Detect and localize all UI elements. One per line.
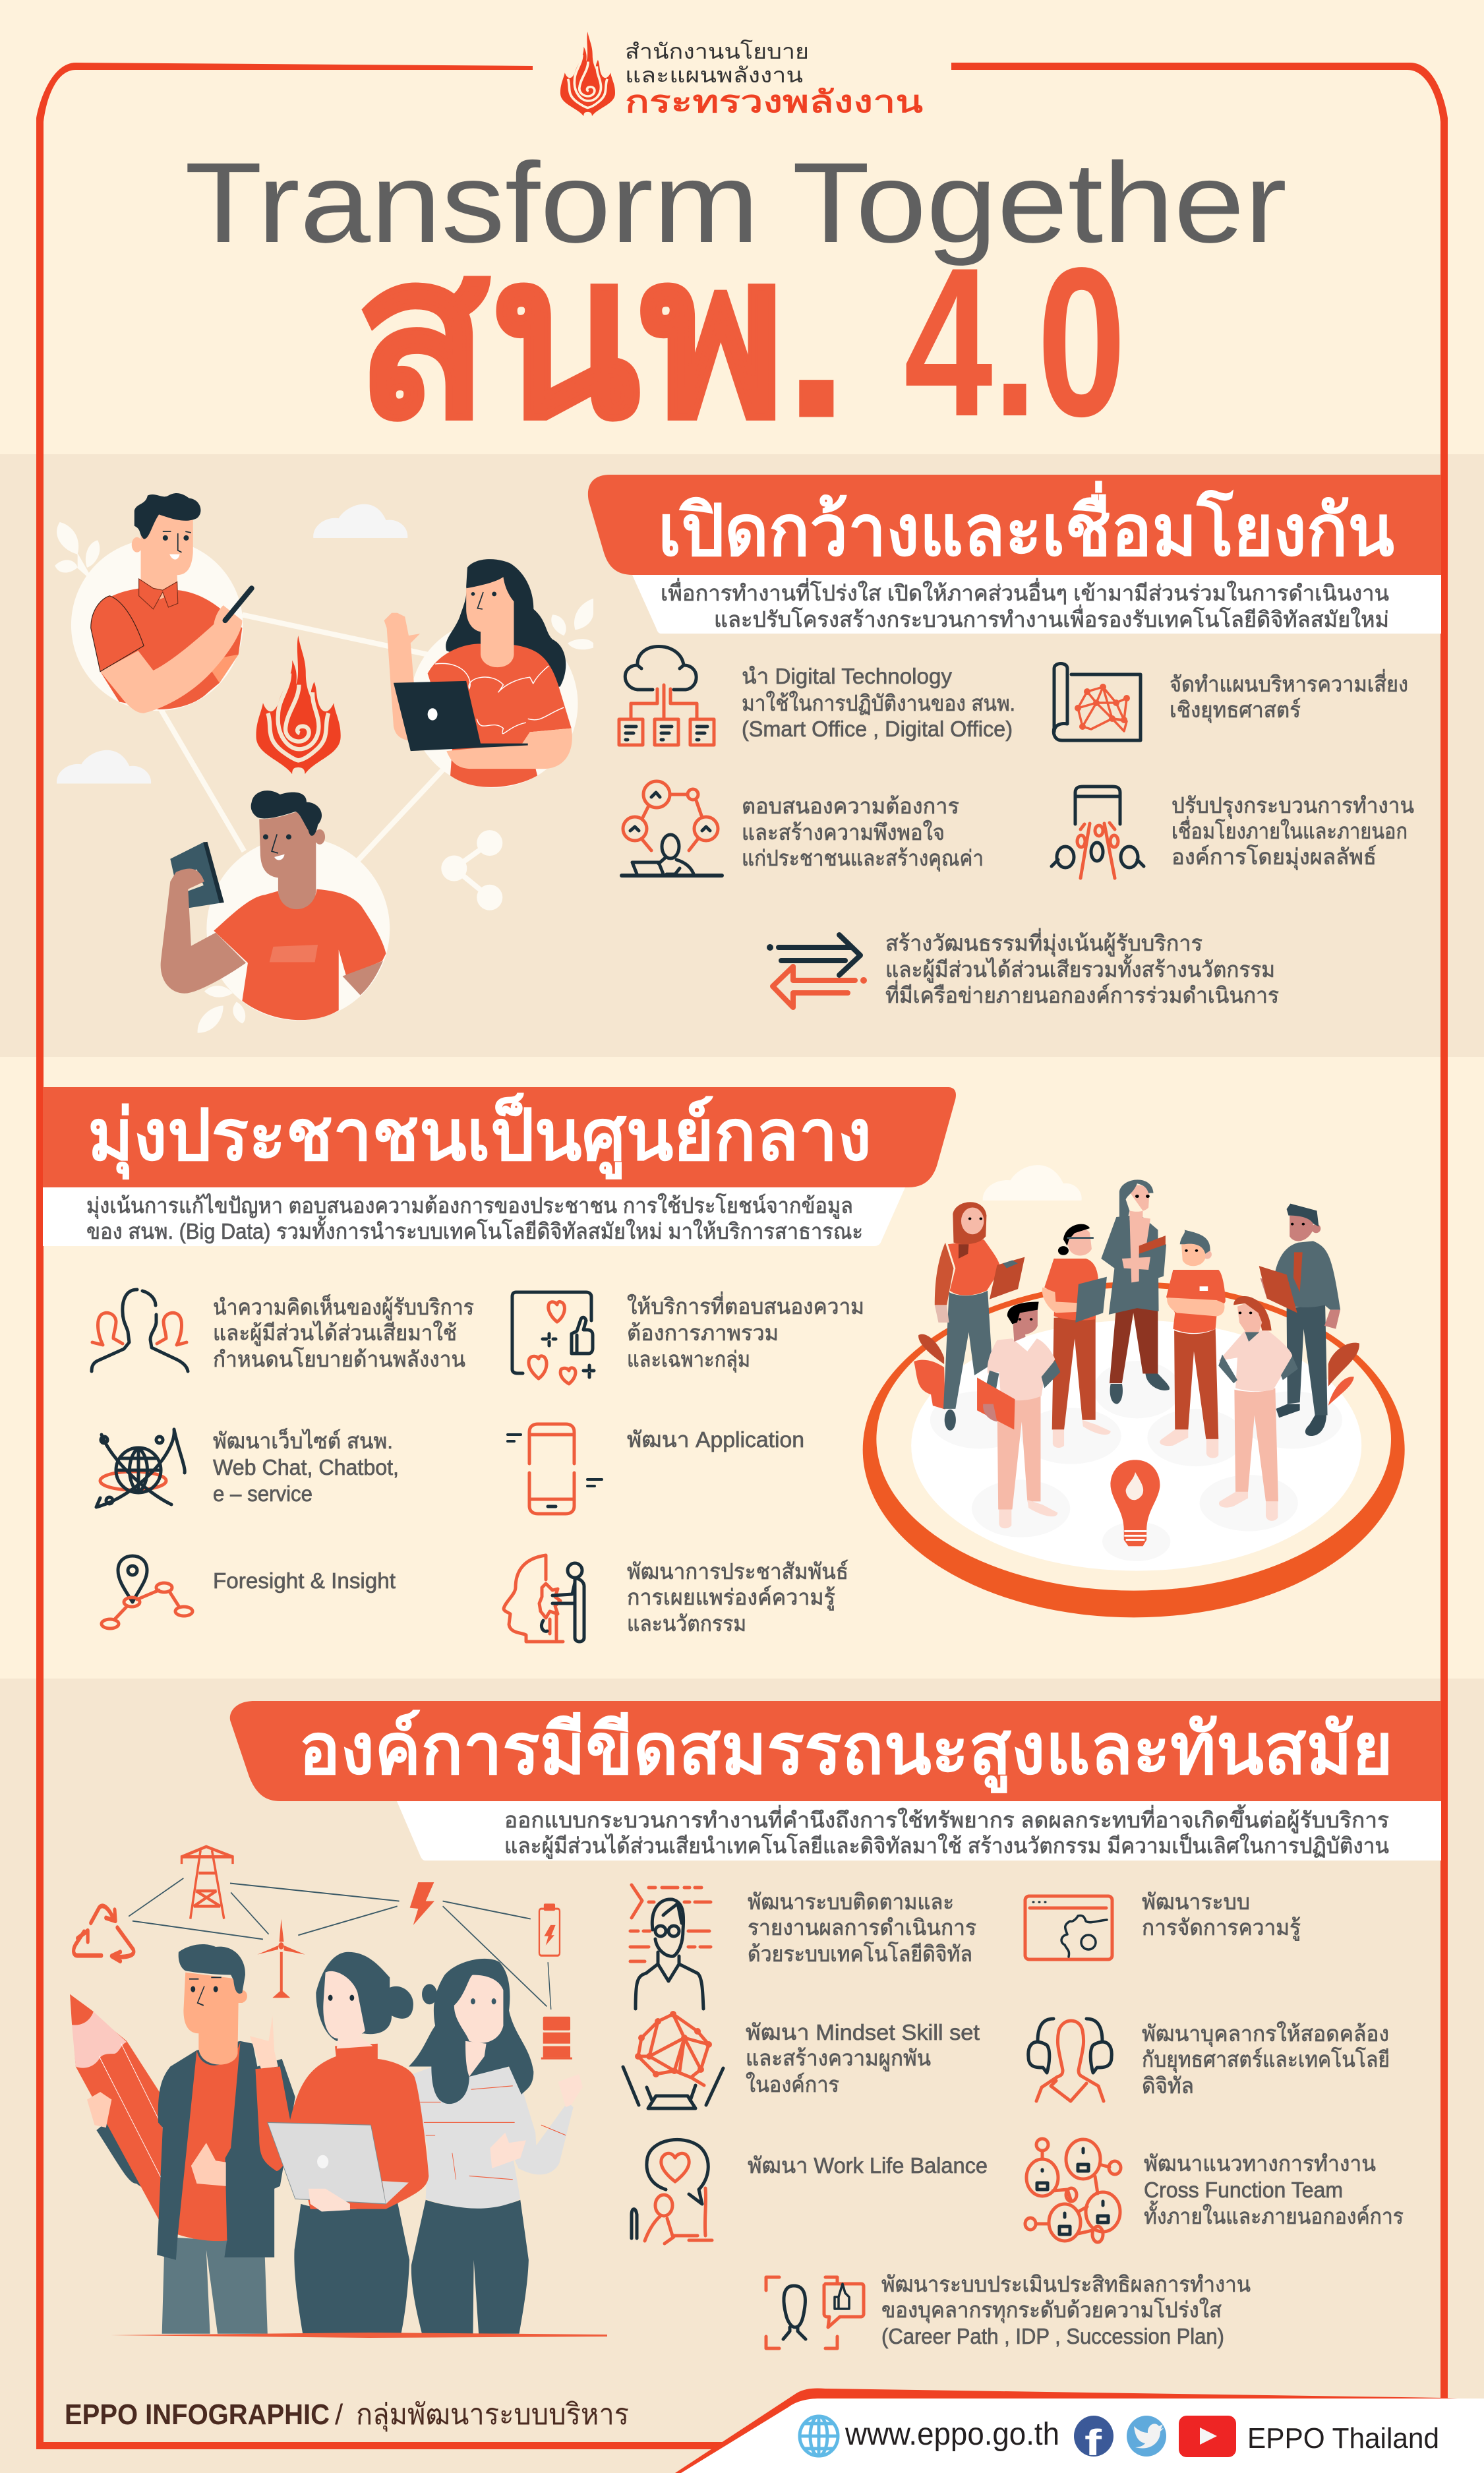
- icon: likes tablet: [512, 1292, 594, 1384]
- footer: [65, 2389, 1484, 2473]
- leaves right: [551, 599, 593, 649]
- website text: www.eppo.go.th: [845, 2417, 1059, 2452]
- icon: globe orbit: [96, 1429, 185, 1507]
- text: monitoring system: พัฒนาระบบติดตามและ: [748, 1890, 954, 1914]
- logo: ministry of energy: [560, 32, 923, 119]
- subheading strip: [632, 575, 1441, 634]
- subheading text: ออกแบบกระบวนการทำงานที่คำนึงถึงการใช้ทรัพยากร ลดผลกระทบที่อาจเกิดขึ้นต่อผู้รับบริการ: [504, 1804, 1389, 1833]
- panel: high performance organization: [230, 1701, 1441, 2348]
- text: culture: สร้างวัฒนธรรมที่มุ่งเน้นผู้รับบริการ: [885, 928, 1202, 957]
- text: staff alignment: ดิจิทัล: [1142, 2073, 1194, 2098]
- text: culture: และผู้มีส่วนได้ส่วนเสียรวมทั้งสร้างนวัตกรรม: [885, 954, 1275, 983]
- text: services: ต้องการภาพรวม: [627, 1321, 779, 1345]
- floor line: [111, 2333, 607, 2338]
- credit text: /: [335, 2399, 343, 2431]
- text: respond to needs: และสร้างความพึงพอใจ: [742, 820, 945, 845]
- heading banner: [588, 475, 1441, 575]
- text: digital technology: (Smart Office , Digital Office): [742, 717, 1013, 741]
- text: improve process: [1172, 793, 1414, 870]
- text: evaluation: [881, 2272, 1251, 2348]
- subheading text: และผู้มีส่วนได้ส่วนเสียนำเทคโนโลยีและดิจิทัลมาใช้ สร้างนวัตกรรม มีความเป็นเลิศในการปฏิบัติงาน: [504, 1833, 1389, 1859]
- panel: open and connected: [588, 475, 1441, 1007]
- text: foresight: Foresight & Insight: [213, 1568, 396, 1593]
- icon: browser gear: [1025, 1896, 1112, 1959]
- icon: phone team: [1052, 787, 1144, 878]
- text: services: และเฉพาะกลุ่ม: [627, 1347, 750, 1373]
- icon: oil barrel: [541, 2017, 572, 2060]
- person: woman in pink: [1218, 1296, 1298, 1521]
- icon: people talking: [1028, 2019, 1112, 2101]
- icon: lightning bolt: [410, 1882, 434, 1925]
- icon: youtube: [1179, 2416, 1236, 2457]
- subheading text: ของ สนพ. (Big Data) รวมทั้งการนำระบบเทคโนโลยีดิจิทัลสมัยใหม่ มาให้บริการสาธารณะ: [86, 1216, 863, 1243]
- panel: citizen centric: [43, 1087, 956, 1642]
- logo text: และแผนพลังงาน: [625, 63, 803, 87]
- icon: facebook: [1074, 2416, 1113, 2463]
- text: services: ให้บริการที่ตอบสนองความ: [627, 1292, 864, 1319]
- heading text: มุ่งประชาชนเป็นศูนย์กลาง: [88, 1092, 872, 1180]
- credit text: กลุ่มพัฒนาระบบบริหาร: [356, 2399, 629, 2432]
- subheading text: และปรับโครงสร้างกระบวนการทำงานเพื่อรองรับเทคโนโลยีดิจิทัลสมัยใหม่: [714, 605, 1389, 632]
- person: man with tablet: [161, 790, 386, 1020]
- title: EPPO 4.0: สนพ.: [355, 210, 847, 464]
- icon: battery: [539, 1903, 560, 1955]
- icon: wind turbine: [257, 1919, 305, 1998]
- heading text: เปิดกว้างและเชื่อมโยงกัน: [658, 481, 1394, 570]
- person: tall woman with coat: [1101, 1179, 1170, 1404]
- text: public relations: พัฒนาการประชาสัมพันธ์: [627, 1559, 848, 1584]
- text: website: พัฒนาเว็บไซต์ สนพ.: [213, 1428, 393, 1453]
- icon: exchange arrows: [767, 935, 867, 1007]
- text: public opinion: กำหนดนโยบายด้านพลังงาน: [213, 1347, 465, 1371]
- text: cross function team: Cross Function Team: [1144, 2178, 1343, 2202]
- cloud: [983, 1165, 1082, 1201]
- subheading text: [661, 578, 1389, 632]
- text: website: e – service: [213, 1481, 312, 1506]
- background band: section one: [0, 454, 1484, 1057]
- text: knowledge management: พัฒนาระบบ: [1142, 1890, 1250, 1914]
- person: woman with laptop: [384, 559, 572, 787]
- leaves left: [55, 522, 100, 581]
- subheading strip: [43, 1187, 905, 1246]
- icon: pylon: [182, 1847, 233, 1919]
- text: monitoring system: [748, 1890, 976, 1966]
- title: Transform Together: Transform Together: [185, 138, 1287, 266]
- icon: work life heart: [632, 2139, 712, 2244]
- text: evaluation: พัฒนาระบบประเมินประสิทธิผลการทำงาน: [881, 2272, 1251, 2296]
- background band: section three: [0, 1679, 1484, 2473]
- text: staff alignment: กับยุทธศาสตร์และเทคโนโลยี: [1142, 2047, 1390, 2073]
- subheading strip: [397, 1801, 1441, 1861]
- icon: logo flame: [560, 32, 615, 116]
- logo text: [625, 40, 923, 119]
- text: cross function team: ทั้งภายในและภายนอกองค์การ: [1144, 2201, 1404, 2228]
- text: mindset: และสร้างความผูกพัน: [746, 2046, 931, 2071]
- text: staff alignment: [1142, 2021, 1390, 2098]
- text: evaluation: ของบุคลากรทุกระดับด้วยความโปร่งใส: [881, 2298, 1222, 2323]
- subheading text: [504, 1804, 1389, 1859]
- text: digital technology: มาใช้ในการปฏิบัติงานของ สนพ.: [742, 691, 1015, 715]
- icon: evaluation: [766, 2277, 864, 2348]
- text: knowledge management: การจัดการความรู้: [1142, 1915, 1301, 1941]
- person: man with phone: [91, 493, 252, 713]
- cloud: [57, 750, 151, 783]
- icon: twitter: [1127, 2416, 1166, 2457]
- floor shadows: [930, 1361, 1342, 1561]
- text: public relations: [627, 1559, 848, 1636]
- text: improve process: เชื่อมโยงภายในและภายนอก: [1172, 816, 1408, 843]
- credit text: EPPO INFOGRAPHIC: [65, 2399, 330, 2431]
- text: monitoring system: ด้วยระบบเทคโนโลยีดิจิทัล: [748, 1942, 972, 1966]
- icon: recycle: [74, 1906, 134, 1961]
- icon: lightbulb flame: [1110, 1460, 1160, 1546]
- footer red swoosh: [675, 2389, 1484, 2473]
- subheading text: [86, 1193, 863, 1243]
- illustration: energy team: [70, 1847, 583, 2334]
- text: staff alignment: พัฒนาบุคลากรให้สอดคล้อง: [1142, 2021, 1389, 2047]
- text: risk plan: เชิงยุทธศาสตร์: [1170, 698, 1301, 723]
- text: public opinion: นำความคิดเห็นของผู้รับบริการ: [213, 1294, 474, 1321]
- text: improve process: องค์การโดยมุ่งผลลัพธ์: [1172, 845, 1377, 870]
- text: respond to needs: แก่ประชาชนและสร้างคุณค่า: [742, 846, 984, 872]
- icon: facebook: f: [1084, 2422, 1102, 2463]
- text: culture: [885, 928, 1279, 1007]
- text: mindset: ในองค์การ: [746, 2072, 839, 2097]
- title: EPPO 4.0: [355, 210, 1126, 464]
- illustration: three connected people: [55, 493, 593, 1033]
- plants: [914, 1334, 1359, 1410]
- channel text: EPPO Thailand: [1247, 2422, 1439, 2455]
- text: digital technology: นำ Digital Technology: [742, 664, 952, 688]
- white platform: [911, 1321, 1361, 1571]
- icon: mobile app: [508, 1424, 602, 1514]
- text: public opinion: และผู้มีส่วนได้ส่วนเสียมาใช้: [213, 1321, 457, 1346]
- text: evaluation: (Career Path , IDP , Succession Plan): [881, 2324, 1224, 2348]
- text: work life balance: พัฒนา Work Life Balance: [748, 2153, 988, 2178]
- text: public opinion: [213, 1294, 474, 1371]
- text: cross function team: พัฒนาแนวทางการทำงาน: [1144, 2151, 1376, 2176]
- text: risk plan: [1170, 669, 1408, 723]
- heading banner: [43, 1087, 956, 1187]
- heading banner: [230, 1701, 1441, 1801]
- text: respond to needs: ตอบสนองความต้องการ: [742, 794, 959, 818]
- cloud: [313, 504, 407, 538]
- icon: brain hologram: [623, 2011, 723, 2108]
- footer white panel: [681, 2399, 1484, 2473]
- subheading text: เพื่อการทำงานที่โปร่งใส เปิดให้ภาคส่วนอื่นๆ เข้ามามีส่วนร่วมในการดำเนินงาน: [661, 578, 1389, 605]
- icon: share nodes: [441, 830, 502, 910]
- logo text: สำนักงานนโยบาย: [625, 40, 809, 63]
- title: EPPO 4.0: 4.0: [904, 224, 1126, 461]
- person: woman with striped sweater: [409, 1959, 583, 2334]
- text: website: [213, 1428, 399, 1506]
- icon: energy flame: [256, 636, 341, 774]
- icon: cloud servers: [619, 646, 714, 745]
- person: woman with hijab: [935, 1202, 1024, 1431]
- text: cross function team: [1144, 2151, 1404, 2228]
- text: respond to needs: [742, 794, 984, 872]
- heading text: องค์การมีขีดสมรรถนะสูงและทันสมัย: [299, 1709, 1393, 1793]
- logo text: กระทรวงพลังงาน: [625, 84, 923, 119]
- icon: map pin route: [102, 1556, 193, 1628]
- leaves bottom: [198, 986, 245, 1033]
- ring inner cream: [876, 1288, 1391, 1591]
- credit text: [65, 2399, 629, 2432]
- energy network lines: [129, 1878, 551, 2010]
- text: public relations: และนวัตกรรม: [627, 1611, 746, 1636]
- text: digital technology: [742, 664, 1015, 741]
- icon: people heads: [92, 1290, 188, 1371]
- person: man with jacket: [157, 1944, 295, 2334]
- person: man with tie: [1259, 1204, 1340, 1436]
- text: knowledge management: [1142, 1890, 1301, 1941]
- person: man with crossed arms: [1160, 1230, 1226, 1458]
- text: risk plan: จัดทำแผนบริหารความเสี่ยง: [1170, 669, 1408, 696]
- icon: globe: [800, 2416, 838, 2456]
- icon: monitoring person: [630, 1885, 711, 2009]
- orange ring: [863, 1282, 1405, 1617]
- person: woman with laptop: [250, 1952, 429, 2334]
- text: services: [627, 1292, 864, 1373]
- pencil: [70, 1994, 163, 2227]
- text: culture: ที่มีเครือข่ายภายนอกองค์การร่วมดำเนินการ: [885, 980, 1279, 1007]
- icon: head gears: [504, 1555, 584, 1642]
- text: monitoring system: รายงานผลการดำเนินการ: [748, 1915, 976, 1940]
- text: mindset: [746, 2020, 980, 2097]
- illustration: team around lightbulb: [863, 1165, 1405, 1617]
- text: mindset: พัฒนา Mindset Skill set: [746, 2020, 980, 2044]
- person: woman with glasses: [1042, 1224, 1111, 1448]
- subheading text: มุ่งเน้นการแก้ไขปัญหา ตอบสนองความต้องการของประชาชน การใช้ประโยชน์จากข้อมูล: [86, 1193, 853, 1219]
- icon: search person: [622, 781, 722, 876]
- text: website: Web Chat, Chatbot,: [213, 1455, 399, 1479]
- text: improve process: ปรับปรุงกระบวนการทำงาน: [1172, 793, 1414, 819]
- icon: risk map: [1054, 663, 1141, 740]
- text: application: พัฒนา Application: [627, 1427, 804, 1452]
- text: public relations: การเผยแพร่องค์ความรู้: [627, 1585, 835, 1611]
- person: man in front: [977, 1301, 1060, 1528]
- icon: cross function nodes: [1025, 2139, 1121, 2242]
